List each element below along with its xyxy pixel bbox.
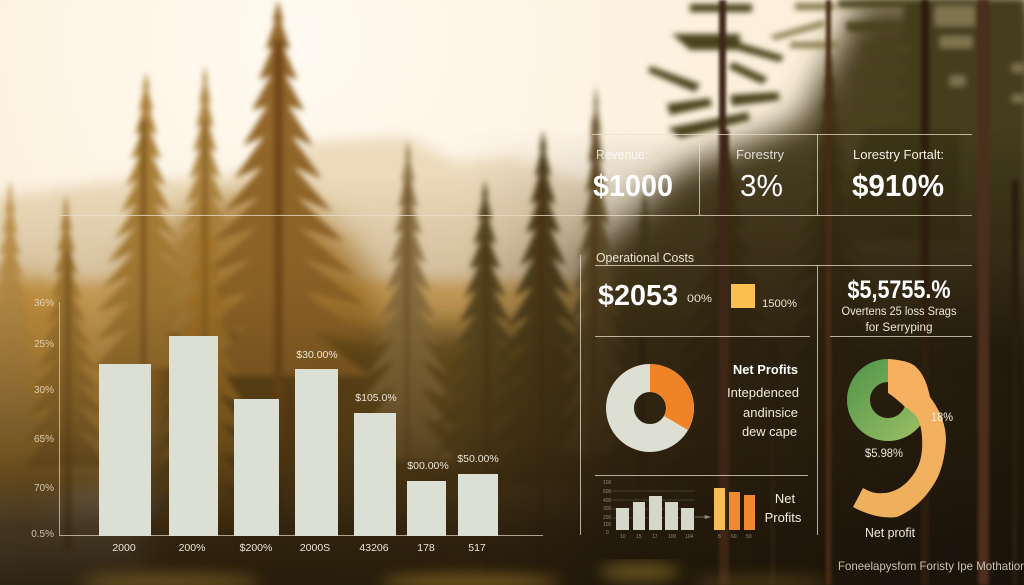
donut chart: net profits share bbox=[620, 364, 694, 438]
panel: revenue KPI bbox=[593, 148, 673, 203]
net profits line 3: dew cape bbox=[742, 424, 797, 439]
value labels: $50.00% bbox=[457, 453, 499, 465]
value labels: $30.00% bbox=[296, 349, 338, 361]
value labels bbox=[296, 349, 499, 472]
label: net profit: Net profit bbox=[865, 525, 915, 540]
y axis labels: 25% bbox=[34, 339, 54, 350]
mini bar chart: grey bars bbox=[603, 480, 695, 540]
x axis labels: 2000S bbox=[300, 542, 330, 554]
x axis labels: 178 bbox=[417, 542, 435, 554]
net profits line 2: andinsice bbox=[743, 405, 798, 420]
mini bar chart: orange bars: 8 bbox=[718, 534, 721, 540]
mini bar chart: grey bars: 100 bbox=[668, 534, 677, 540]
mini bar chart: grey bars: 200 bbox=[603, 515, 612, 521]
savings value: $5,5755.% bbox=[848, 276, 950, 304]
x axis labels: 43206 bbox=[359, 542, 389, 554]
cost value: $2053 bbox=[598, 280, 678, 312]
donut chart: net profit spiral bbox=[853, 359, 946, 517]
savings caption line 1: Overtens 25 loss Srags bbox=[842, 306, 957, 318]
value labels: $105.0% bbox=[355, 392, 397, 404]
panel: forestry KPI bbox=[736, 148, 785, 203]
panel: savings callout bbox=[842, 276, 957, 334]
icon: yellow legend square bbox=[731, 284, 755, 308]
y axis labels: 70% bbox=[34, 483, 54, 494]
mini bar chart: grey bars: 300 bbox=[603, 506, 612, 512]
mini bar chart: grey bars: 500 bbox=[603, 489, 612, 495]
forestry label: Forestry bbox=[736, 148, 785, 162]
mini bar chart: grey bars: 400 bbox=[603, 498, 612, 504]
bars bbox=[99, 336, 498, 536]
panel: forestry portal KPI bbox=[852, 148, 944, 203]
heading: operational costs: Operational Costs bbox=[596, 251, 694, 265]
cost percent: 00% bbox=[687, 293, 712, 305]
label: donut value: $5.98% bbox=[865, 446, 903, 460]
background: tree trunks bbox=[640, 0, 1018, 585]
forestry portal label: Lorestry Fortalt: bbox=[853, 148, 944, 162]
forestry portal value: $910% bbox=[852, 168, 944, 203]
savings caption line 2: for Serryping bbox=[866, 322, 932, 334]
label: net profits beside mini bars bbox=[765, 491, 802, 525]
x axis labels: 517 bbox=[468, 542, 486, 554]
net profits line 1: Intepdenced bbox=[727, 385, 799, 400]
mini bar chart: grey bars: 17 bbox=[652, 534, 658, 540]
arrow: grey bars to orange bars bbox=[695, 516, 710, 518]
chart axes bbox=[60, 302, 543, 536]
bar chart: yearly values bbox=[31, 298, 543, 554]
value labels: $00.00% bbox=[407, 460, 449, 472]
y axis labels: 0.5% bbox=[31, 529, 54, 540]
label: net profits beside mini bars: Profits bbox=[765, 510, 802, 525]
net profits title: Net Profits bbox=[733, 362, 798, 377]
y axis labels: 30% bbox=[34, 385, 54, 396]
label: net profits beside mini bars: Net bbox=[775, 491, 796, 506]
mini bar chart: grey bars: 10 bbox=[620, 534, 626, 540]
mini bar chart: grey bars: 100 bbox=[603, 522, 612, 528]
panel: operational cost figures bbox=[598, 280, 797, 312]
mini bar chart: orange bars bbox=[714, 488, 755, 540]
orange spiral segment bbox=[853, 359, 946, 517]
panel: net profits text bbox=[727, 362, 799, 439]
y axis labels bbox=[31, 298, 54, 540]
x axis labels: 2000 bbox=[112, 542, 136, 554]
x axis labels: 200% bbox=[179, 542, 205, 554]
x axis labels bbox=[112, 542, 486, 554]
label: donut percent: 18% bbox=[931, 410, 953, 424]
mini bar chart: grey bars: 104 bbox=[685, 534, 694, 540]
revenue value: $1000 bbox=[593, 168, 673, 203]
mini bar chart: grey bars: 100 bbox=[603, 480, 612, 486]
mini bar chart: orange bars: 60 bbox=[731, 534, 737, 540]
mini bar chart: grey bars: 15 bbox=[636, 534, 642, 540]
revenue label: Revenue: bbox=[596, 148, 648, 162]
mini bar chart: grey bars: 0 bbox=[606, 530, 609, 536]
mini bar chart: orange bars: 50 bbox=[746, 534, 752, 540]
divider lines and panel grid bbox=[60, 134, 972, 535]
legend percent: 1500% bbox=[762, 298, 797, 310]
green ring segment bbox=[858, 370, 918, 430]
background: foreground grass bbox=[80, 562, 830, 585]
background: pine foliage upper right bbox=[648, 0, 1024, 240]
y axis labels: 65% bbox=[34, 434, 54, 445]
x axis labels: $200% bbox=[240, 542, 272, 554]
forestry value: 3% bbox=[740, 168, 783, 203]
y axis labels: 36% bbox=[34, 298, 54, 309]
